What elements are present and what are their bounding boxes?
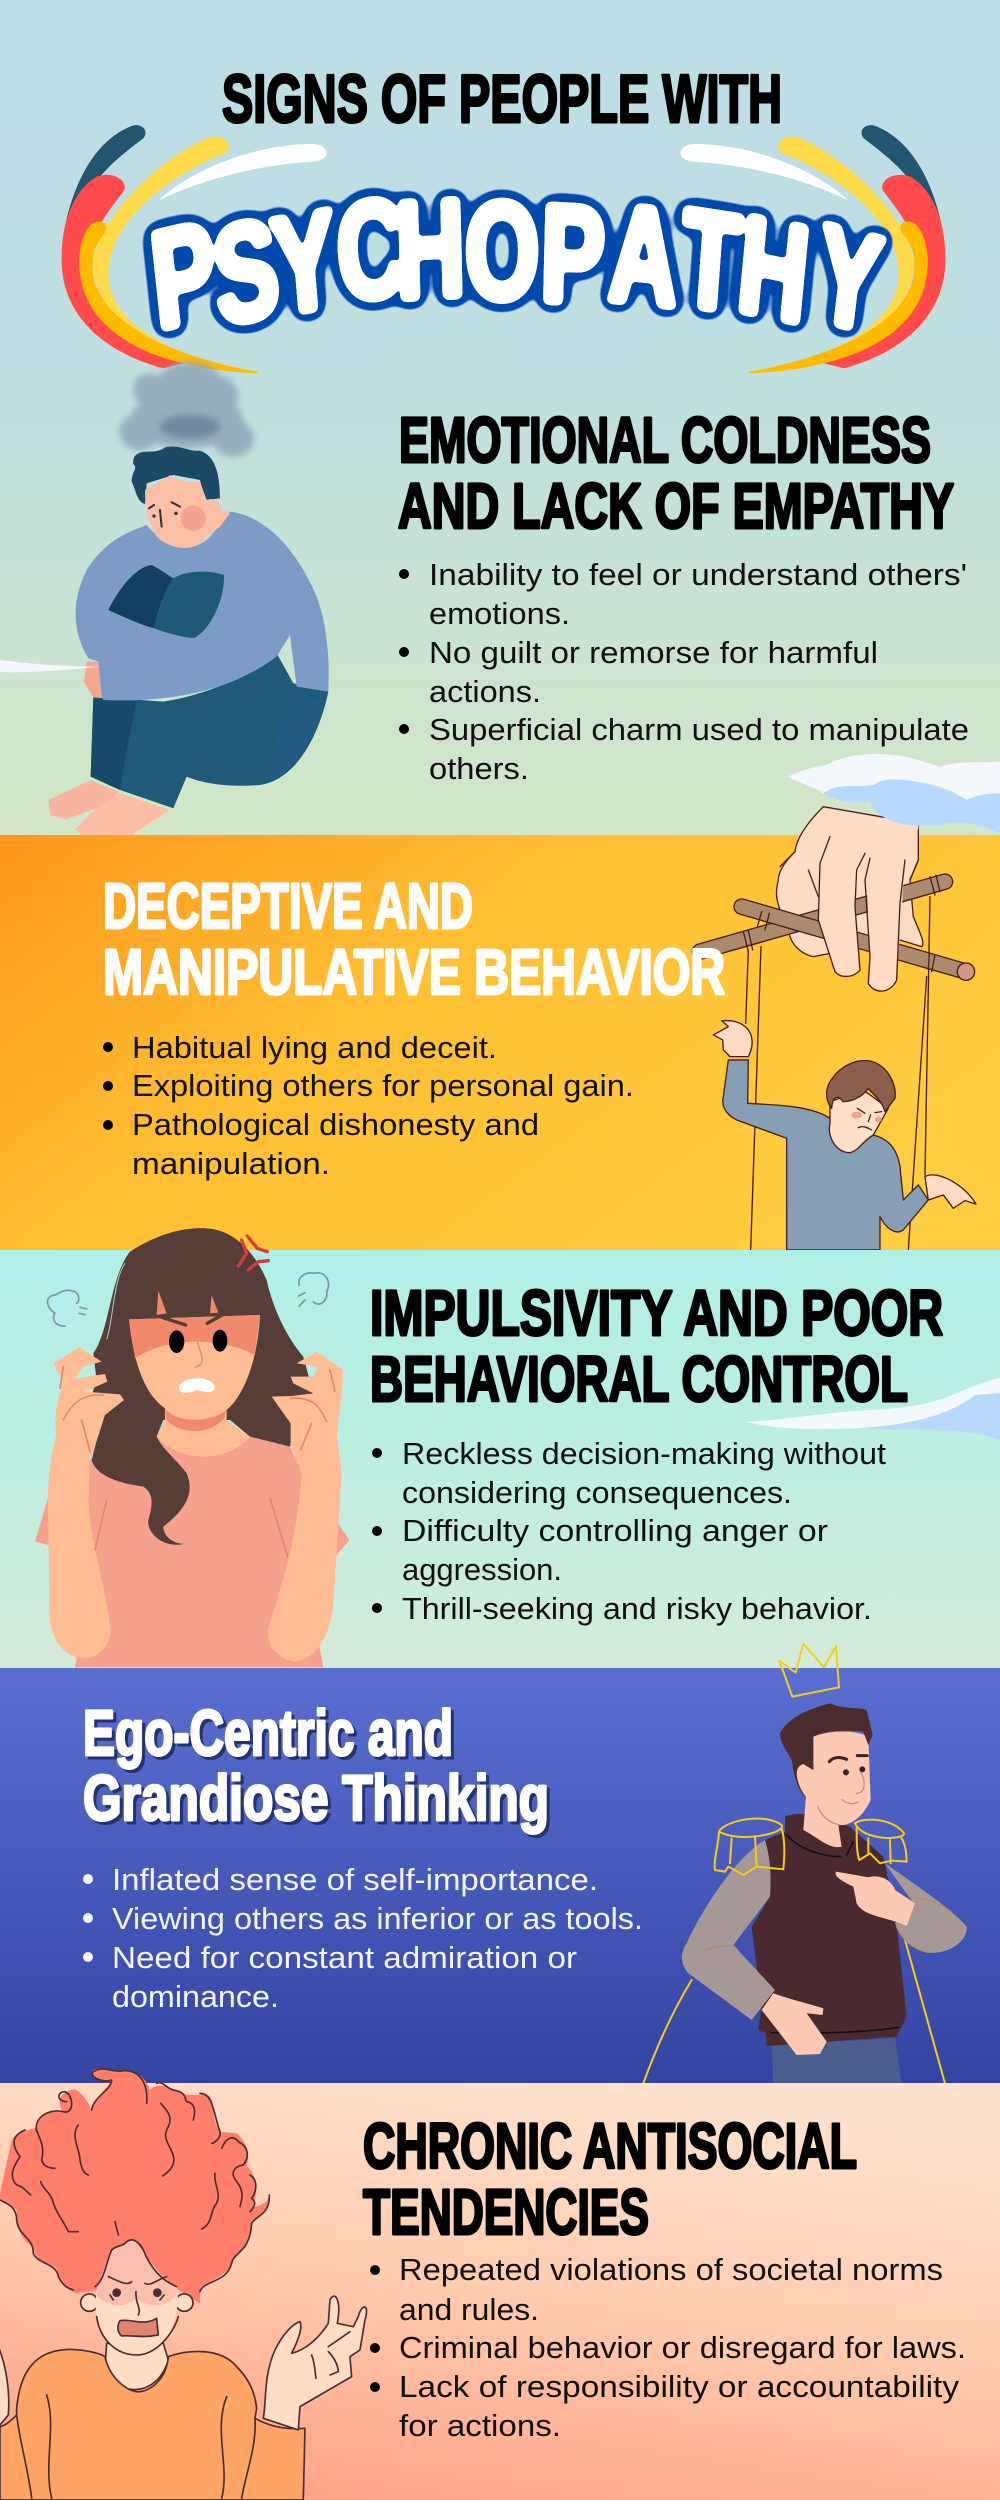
illustration: sad man hugging knees under a cloud	[0, 362, 329, 837]
hair	[0, 2068, 270, 2303]
bullet list: ego-centric: Inflated sense of self-importance.	[112, 1862, 598, 1897]
panel: deceptive and manipulative behavior	[0, 754, 1000, 1250]
trousers	[772, 2038, 902, 2083]
panel: impulsivity and poor behavioral control	[0, 1228, 1000, 1668]
bullet list: emotional coldness: others.	[429, 751, 529, 786]
anger mark	[238, 1236, 268, 1270]
bullet list: emotional coldness: emotions.	[429, 596, 570, 631]
bullet list: chronic antisocial: Repeated violations of societal norms	[399, 2252, 943, 2287]
bullet list: ego-centric: Viewing others as inferior or as tools.	[112, 1901, 643, 1936]
decorative swooshes: right	[681, 125, 945, 373]
bullet list: deceptive behavior: manipulation.	[132, 1146, 330, 1181]
sleeves	[682, 1840, 775, 2020]
bullet list: emotional coldness: Inability to feel or understand others'	[429, 557, 967, 592]
hand palm	[777, 807, 923, 957]
puppet control sticks	[700, 875, 975, 980]
facial features	[843, 1769, 849, 1775]
feet	[48, 780, 118, 819]
panel: chronic antisocial tendencies	[0, 2068, 1000, 2500]
heading: deceptive and manipulative behavior: MANIPULATIVE BEHAVIOR	[103, 936, 725, 1008]
hands	[836, 1872, 915, 1926]
cape lines	[643, 1940, 945, 2083]
puppet body	[723, 1060, 928, 1250]
bullet list: ego-centric: Need for constant admiration or	[112, 1940, 577, 1975]
heading: impulsivity	[370, 1277, 943, 1415]
mouth	[118, 2318, 158, 2336]
bullet list: deceptive behavior: Habitual lying and deceit.	[132, 1030, 497, 1065]
sweater	[76, 512, 329, 700]
heading: chronic antisocial tendencies: TENDENCIES	[363, 2176, 649, 2248]
bullet list: impulsivity: Reckless decision-making without	[402, 1436, 886, 1471]
illustration: self-important man with crown	[643, 1644, 967, 2083]
knees	[108, 565, 173, 628]
bullet list: emotional coldness: No guilt or remorse for harmful	[429, 635, 878, 670]
swoosh at left edge	[0, 660, 100, 672]
vest	[752, 1814, 907, 2046]
bullet list: ego-centric	[83, 1862, 643, 2014]
trousers	[91, 653, 328, 808]
face	[129, 1315, 260, 1423]
puppet head	[829, 1090, 888, 1153]
cloud over hand	[788, 754, 1000, 800]
illustration: puppeteer hand and puppet	[700, 754, 1000, 1250]
hair	[132, 446, 220, 504]
shirt	[35, 1437, 349, 1667]
bullet list: impulsivity: considering consequences.	[402, 1475, 792, 1510]
strings	[746, 897, 930, 1250]
left hand	[0, 2347, 9, 2425]
heading: ego-centric	[83, 1697, 549, 1834]
heading: deceptive and manipulative behavior: DECEPTIVE AND	[103, 870, 473, 942]
panel: emotional coldness text	[398, 404, 969, 786]
face	[145, 475, 230, 548]
hair	[90, 1228, 313, 1545]
neck shadow and chest	[157, 1420, 250, 1457]
hands	[53, 1347, 124, 1457]
ears	[81, 2294, 98, 2311]
heading: chronic antisocial tendencies	[363, 2110, 857, 2248]
icon: grey cloud	[119, 362, 254, 457]
crown	[779, 1644, 839, 1697]
hair	[780, 1703, 873, 1799]
bullet list: impulsivity: aggression.	[402, 1552, 562, 1587]
bullet list: impulsivity: Difficulty controlling anger or	[402, 1513, 828, 1548]
epaulettes	[715, 1819, 784, 1875]
neck and face	[796, 1732, 871, 1847]
bullet list: chronic antisocial: Criminal behavior or disregard for laws.	[399, 2330, 966, 2365]
bullet list: impulsivity	[372, 1436, 886, 1626]
hand	[84, 662, 104, 698]
eyes and brows	[112, 2288, 121, 2297]
illustration: frustrated person with wild red hair	[0, 2068, 367, 2500]
bullet list: deceptive behavior	[103, 1030, 634, 1181]
neck	[105, 2343, 168, 2390]
right hand	[263, 2296, 367, 2430]
bullet list: emotional coldness: actions.	[429, 674, 541, 709]
bullet list: emotional coldness	[399, 557, 969, 786]
heading: deceptive and manipulative behavior	[103, 870, 725, 1008]
face	[96, 2242, 178, 2355]
heading: ego-centric: Ego-Centric and	[83, 1697, 453, 1769]
illustration: angry woman pulling her hair	[35, 1228, 349, 1667]
arms	[48, 1433, 111, 1658]
bullet list: impulsivity: Thrill-seeking and risky behavior.	[402, 1591, 872, 1626]
hair highlight	[107, 1263, 125, 1339]
puppet hands	[713, 1021, 752, 1057]
bullet list: ego-centric: dominance.	[112, 1979, 279, 2014]
bullet list: deceptive behavior: Exploiting others for personal gain.	[132, 1068, 634, 1103]
eyes, brows, nose, mouth	[169, 1330, 184, 1353]
title: psychopathy arched wordmark: PSYCHOPATHY	[144, 169, 889, 364]
bullet list: deceptive behavior: Pathological dishonesty and	[132, 1107, 539, 1142]
bullet list: chronic antisocial: and rules.	[399, 2292, 539, 2327]
panel: ego-centric and grandiose thinking	[0, 1644, 1000, 2083]
bullet list: emotional coldness: Superficial charm used to manipulate	[429, 712, 969, 747]
illustration: cloud at right edge	[746, 1378, 1000, 1440]
sweater	[0, 2349, 305, 2500]
bullet list: chronic antisocial: for actions.	[399, 2408, 561, 2443]
heading: emotional coldness	[398, 404, 954, 542]
front fingers	[818, 810, 918, 991]
heading: ego-centric: Grandiose Thinking	[83, 1762, 549, 1834]
bullet list: chronic antisocial	[370, 2252, 966, 2443]
hair outline curls	[0, 2069, 269, 2292]
steam puffs	[47, 1273, 329, 1326]
bullet list: chronic antisocial: Lack of responsibility or accountability	[399, 2369, 960, 2404]
decorative swooshes: left	[62, 125, 326, 373]
panel: emotional coldness	[0, 0, 1000, 837]
